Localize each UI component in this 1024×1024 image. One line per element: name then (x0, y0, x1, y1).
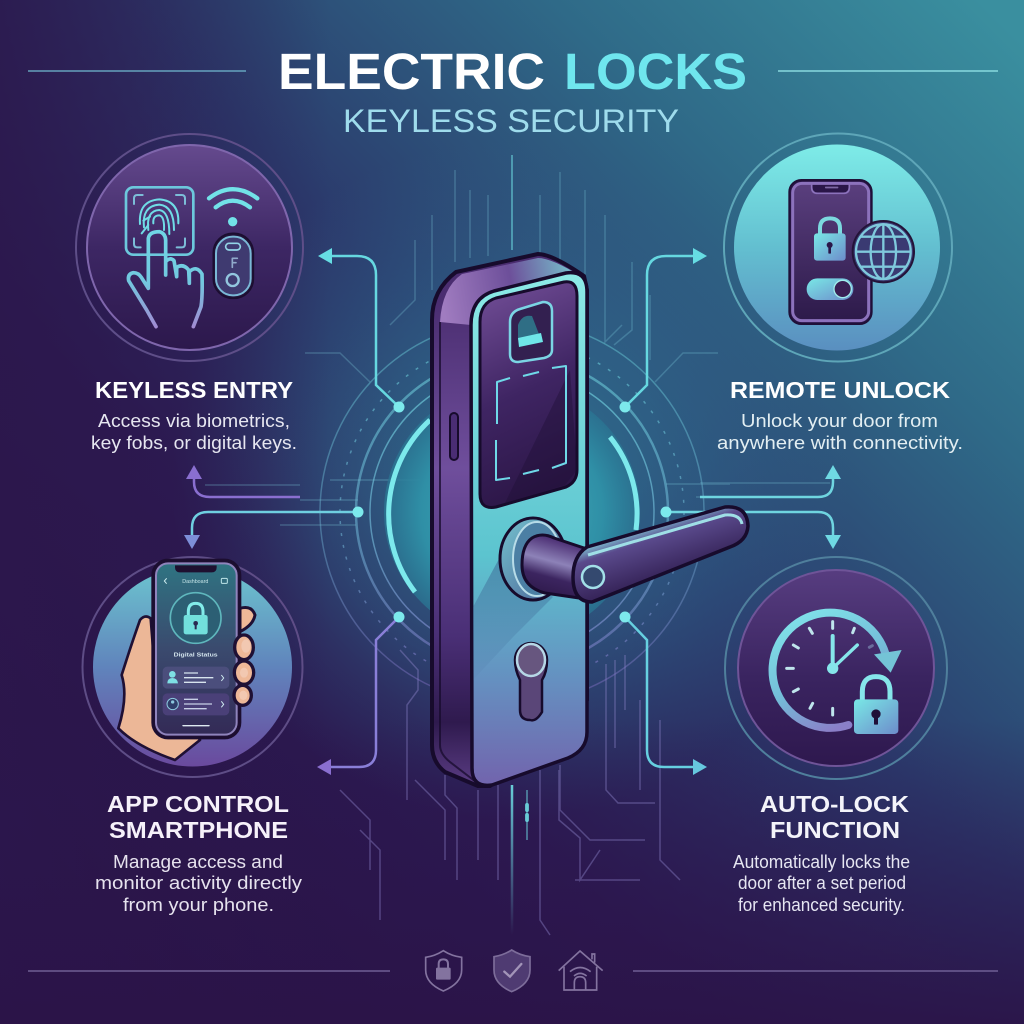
description line 2: anywhere with connectivity. (717, 433, 963, 453)
icon: hand holding phone (118, 560, 255, 760)
panel: keyless entry (76, 134, 303, 453)
center vertical beam (512, 155, 527, 935)
lock body side (432, 254, 587, 786)
connector: auto-lock arrow (620, 612, 707, 775)
description line 2: monitor activity directly (95, 873, 302, 893)
icon: shield with check (494, 950, 530, 992)
connector: remote unlock arrow (620, 248, 707, 412)
panel: auto-lock function (725, 557, 947, 915)
purple disc (87, 145, 292, 350)
icon: phone, padlock and globe (789, 180, 914, 324)
teal disc (734, 144, 940, 350)
footer rule right (633, 970, 998, 972)
lever highlight (588, 515, 742, 555)
heading: REMOTE UNLOCK (730, 377, 950, 403)
central glow rings (320, 320, 704, 704)
lock front plate (471, 273, 587, 785)
title rule left (28, 70, 246, 72)
lever end cap (582, 566, 604, 588)
handle rosette (500, 518, 566, 600)
footer (28, 950, 998, 992)
electric lock device (432, 254, 748, 786)
gradient disc (93, 568, 292, 766)
title: electric: ELECTRIC (278, 43, 545, 100)
touch screen (480, 282, 577, 507)
side button (450, 413, 458, 460)
circuit traces lower (340, 650, 680, 935)
keyhole ring (517, 644, 545, 676)
description line 1: Automatically locks the (733, 852, 910, 872)
description line 1: Unlock your door from (741, 411, 938, 431)
connector: app control arrow (317, 612, 404, 775)
heading line 2: SMARTPHONE (109, 817, 288, 843)
side inner edge (440, 322, 476, 782)
connector: right middle arrows (660, 465, 841, 549)
outer ring (76, 134, 303, 361)
heading line 2: FUNCTION (770, 817, 900, 843)
fingerprint sensor (510, 302, 552, 362)
handle rosette highlight (513, 522, 561, 596)
heading line 1: AUTO-LOCK (760, 791, 909, 817)
subtitle: KEYLESS SECURITY (343, 103, 679, 139)
description line 1: Manage access and (113, 852, 283, 872)
description line 3: for enhanced security. (738, 895, 905, 915)
connector: keyless entry arrow (318, 248, 404, 412)
title rule right (778, 70, 998, 72)
icon: fingerprint scanner and hand (126, 187, 257, 327)
outer ring (725, 557, 947, 779)
description line 1: Access via biometrics, (98, 411, 290, 431)
title: locks: LOCKS (564, 43, 747, 100)
panel: app control smartphone (82, 557, 302, 915)
outer ring (82, 557, 302, 777)
keyhole escutcheon (515, 643, 547, 720)
connector: left middle arrows (184, 465, 364, 549)
icon: shield with padlock (426, 951, 462, 991)
panel: remote unlock (717, 134, 963, 453)
top face (440, 258, 582, 325)
outer ring (724, 134, 952, 362)
footer rule left (28, 970, 390, 972)
icon: clock with padlock (773, 613, 902, 734)
description line 2: door after a set period (738, 873, 906, 893)
icon: hand holding phone: Dashboard (182, 579, 208, 585)
dashed scan frame (496, 366, 566, 480)
handle lever (573, 507, 748, 602)
brushed metal shading (473, 557, 553, 680)
title block (28, 43, 998, 139)
description line 2: key fobs, or digital keys. (91, 433, 297, 453)
circuit traces upper (205, 170, 830, 525)
heading: KEYLESS ENTRY (95, 377, 293, 403)
screen reflection (505, 370, 577, 503)
description line 3: from your phone. (123, 895, 274, 915)
heading line 1: APP CONTROL (107, 791, 289, 817)
purple disc (738, 570, 934, 766)
icon: hand holding phone: Digital Status (174, 653, 218, 659)
handle neck (522, 535, 596, 599)
icon: smart home (559, 951, 603, 990)
